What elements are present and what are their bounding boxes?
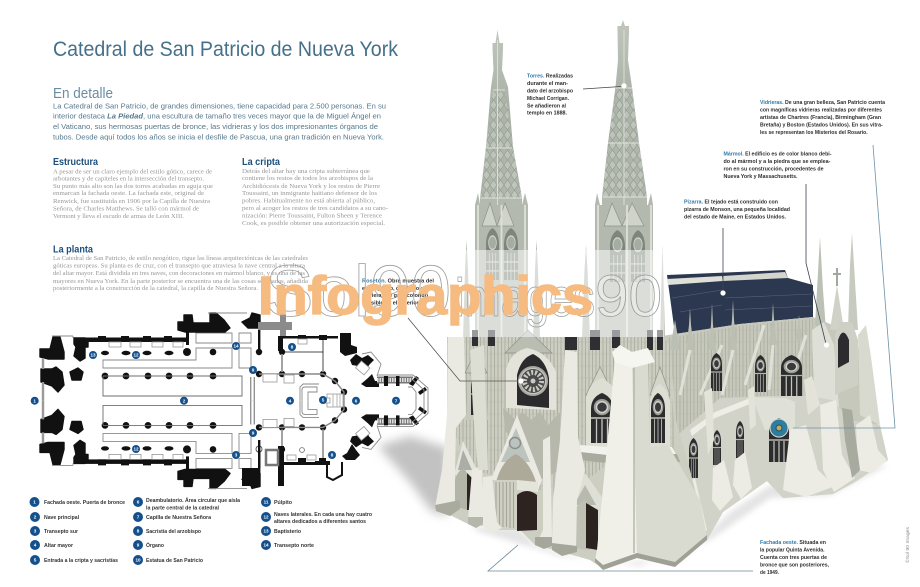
callout: Torres: templo en 1888. bbox=[527, 111, 567, 117]
callout: Vidrieras: Bretaña) y Boston (Estados Unidos). En sus vitra- bbox=[760, 123, 883, 129]
lower aisle wall bbox=[672, 396, 888, 540]
right portal bbox=[568, 473, 604, 550]
plan number markers: 14 bbox=[233, 344, 239, 349]
north transept grey cross bbox=[258, 314, 292, 338]
north sacristy wall bbox=[278, 333, 357, 356]
ledges below windows bbox=[580, 445, 680, 463]
gallery below rose window bbox=[503, 408, 560, 480]
plan number markers: 8 bbox=[291, 345, 294, 350]
side windows bbox=[689, 353, 802, 478]
dark slits under towers bbox=[472, 330, 663, 350]
text block: La cripta: pobres. Habitualmente no está abierta al público, bbox=[242, 199, 376, 205]
text block: Estructura bbox=[53, 156, 213, 220]
plan number markers: 3 bbox=[235, 453, 238, 458]
cathedral side wing bbox=[660, 233, 888, 541]
callout: Vidrieras: artistas de Chartres (Francia), Birmingham (Gran bbox=[760, 115, 882, 121]
legend: 8 bbox=[137, 529, 140, 534]
legend: Transepto norte bbox=[274, 543, 314, 549]
text block: La cripta: nización: Pierre Toussaint, Fulton Sheen y Terence bbox=[242, 214, 382, 220]
legend: Sacristía del arzobispo bbox=[146, 529, 201, 535]
text block: La planta: del altar mayor. Está dividida en tres naves, con decoraciones en mármol blanco, y es una de las bbox=[53, 271, 306, 277]
translucent white band over towers bbox=[448, 250, 664, 337]
east end chapel and pinnacles bbox=[812, 233, 880, 430]
legend: 3 bbox=[34, 529, 37, 534]
legend: Estatua de San Patricio bbox=[146, 558, 203, 564]
legend: Fachada oeste. Puerta de bronce bbox=[44, 500, 125, 506]
clerestory wall bbox=[660, 317, 888, 540]
legend: Nave principal bbox=[44, 515, 79, 521]
text block: Estructura: Señora, de Charles Matthews. Se talló con mármol de bbox=[53, 206, 199, 212]
cathedral spires and towers bbox=[463, 20, 665, 340]
text block: La planta: mayores en Nueva York. En la parte posterior se encuentra una de las cosas separadas, añadida bbox=[53, 279, 308, 285]
callout: Fachada oeste bbox=[488, 540, 829, 576]
plan number markers: 1 bbox=[33, 398, 36, 403]
title: Catedral de San Patricio de Nueva York bbox=[53, 37, 398, 61]
callout: Marmol bbox=[724, 152, 832, 348]
text block: La cripta: pero al acoger los restos de tres candidatos a su cano- bbox=[242, 206, 388, 212]
plan number markers: 7 bbox=[395, 398, 398, 403]
callout: Vidrieras bbox=[760, 100, 895, 428]
left spire bbox=[480, 30, 522, 210]
south sacristy and stairs bbox=[242, 440, 360, 486]
legend: Naves laterales. En cada una hay cuatro bbox=[274, 512, 372, 518]
intro block: En detalle: el Vaticano, sus hermosas puertas de bronce, las vidrieras y los dos impresionantes órganos de bbox=[53, 122, 378, 131]
legend: Órgano bbox=[146, 541, 164, 549]
text block: Estructura: A pesar de ser un claro ejemplo del estilo gótico, carece de bbox=[53, 170, 212, 176]
plan number markers: 12 bbox=[133, 447, 139, 452]
right tower bbox=[582, 193, 665, 340]
callout: Vidrieras: les se representan los Misterios del Rosario. bbox=[760, 130, 868, 136]
legend: 5 bbox=[34, 558, 37, 563]
west buttresses bbox=[435, 337, 585, 556]
legend: Púlpito bbox=[274, 500, 292, 506]
facade stonework texture bbox=[447, 337, 676, 500]
watermark: Infographics bbox=[258, 266, 593, 326]
facade windows bbox=[466, 373, 670, 447]
plan number markers: 2 bbox=[183, 398, 186, 403]
legend: 9 bbox=[137, 543, 140, 548]
text block: La planta: góticas europeas. Su planta es de cruz, con el transepto que atraviesa la nave central a la altura bbox=[53, 264, 305, 270]
callout: Roseton: vidrieras de gran colorido bbox=[362, 293, 429, 299]
slate roof bbox=[667, 270, 813, 334]
north half of plan bbox=[40, 313, 428, 401]
text block: La cripta: contiene los restos de todos los arzobispos de la bbox=[242, 176, 373, 182]
legend bbox=[30, 497, 372, 565]
callout: Fachada oeste: Cuenta con tres puertas de bbox=[760, 555, 827, 561]
legend: altares dedicados a diferentes santos bbox=[274, 519, 366, 525]
callout: Fachada oeste: la popular Quinta Avenida. bbox=[760, 548, 825, 554]
left tower bbox=[463, 193, 540, 340]
main portal bbox=[487, 415, 542, 531]
plan number markers: 6 bbox=[355, 398, 358, 403]
text block: La cripta: Cook, es posible obtener una autorización especial. bbox=[242, 221, 386, 227]
central corner buttress bbox=[595, 345, 707, 570]
intro block: En detalle: En detalle bbox=[53, 85, 113, 102]
text block: La cripta: Toussaint, un inmigrante haitiano defensor de los bbox=[242, 190, 378, 197]
plan number markers bbox=[31, 342, 400, 459]
text block: La cripta bbox=[242, 156, 388, 227]
callout: Pizarra bbox=[684, 200, 791, 296]
callout: Pizarra: del estado de Maine, en Estados Unidos. bbox=[684, 215, 786, 221]
side buttresses bbox=[680, 376, 887, 541]
legend: 2 bbox=[34, 515, 37, 520]
text block: La planta: La Catedral de San Patricio, de estilo neogótico, rigue las líneas arquitectónicas de las catedrales bbox=[53, 256, 309, 262]
legend: 4 bbox=[34, 543, 37, 548]
gables above windows bbox=[465, 330, 670, 395]
callout: Roseton bbox=[362, 279, 524, 384]
text block: La planta bbox=[53, 244, 309, 292]
legend: la parte central de la catedral bbox=[146, 505, 219, 511]
callout: Roseton: estilo gótico, diseñado con bbox=[362, 286, 431, 292]
intro block: En detalle: La Catedral de San Patricio, de grandes dimensiones, tiene capacidad para 2.500 personas. En su bbox=[53, 101, 386, 110]
plan number markers: 9 bbox=[252, 431, 255, 436]
legend: 13 bbox=[263, 529, 269, 534]
image credit: ©Sol 90 Images bbox=[904, 526, 911, 563]
callout: Marmol: ron en su construcción, procedentes de bbox=[724, 167, 824, 173]
legend: Altar mayor bbox=[44, 543, 74, 549]
text block: La planta: La planta bbox=[53, 244, 93, 256]
callout: Marmol: Nueva York y Massachusetts. bbox=[724, 174, 798, 180]
text block: Estructura: arbotantes y de capiteles en la intersección del transepto. bbox=[53, 177, 205, 183]
callout: Torres: durante el man- bbox=[527, 81, 568, 87]
callout: Fachada oeste: bronce que son posteriores, bbox=[760, 563, 829, 569]
callout: Torres: Torres. Realizadas bbox=[527, 74, 573, 80]
south half of plan bbox=[40, 401, 428, 488]
callout: Pizarra: pizarra de Monson, una pequeña localidad bbox=[684, 207, 791, 213]
rose window bbox=[506, 348, 556, 410]
callout: Fachada oeste: Fachada oeste. Situada en bbox=[760, 540, 827, 546]
legend: Baptisterio bbox=[274, 529, 301, 535]
callout: Torres bbox=[527, 74, 627, 117]
ground shadow of the cathedral bbox=[378, 436, 888, 566]
intro block: En detalle bbox=[53, 85, 386, 142]
plan number markers: 4 bbox=[289, 398, 292, 403]
callout: Pizarra: Pizarra. El tejado está construido con bbox=[684, 200, 779, 206]
facade body bbox=[436, 337, 707, 568]
legend: 10 bbox=[135, 558, 141, 563]
callout: Vidrieras: Vidrieras. De una gran belleza, San Patricio cuenta bbox=[760, 100, 886, 106]
watermark bbox=[258, 252, 662, 332]
legend: 14 bbox=[263, 543, 269, 548]
text block: La cripta: La cripta bbox=[242, 156, 280, 168]
flying buttress struts bbox=[680, 325, 806, 395]
text block: La cripta: Archidiócesis de Nueva York y los restos de Pierre bbox=[242, 184, 380, 190]
legend: Deambulatorio. Área circular que aísla bbox=[146, 497, 241, 504]
plan number markers: 8 bbox=[331, 453, 334, 458]
callout: Torres: Michael Corrigan. bbox=[527, 96, 569, 102]
plan number markers: 5 bbox=[322, 398, 325, 403]
callout: Roseton: Rosetón. Obra muestra del bbox=[362, 279, 434, 285]
far right portal bbox=[660, 470, 690, 542]
text block: Estructura: Renwick, fue sustituida en 1906 por la Capilla de Nuestra bbox=[53, 198, 210, 205]
left portal bbox=[454, 441, 477, 512]
callout: Roseton: y visible en el exterior. bbox=[362, 301, 420, 307]
callout: Vidrieras: con magníficas vidrieras realizadas por diferentes bbox=[760, 108, 882, 114]
legend: Transepto sur bbox=[44, 529, 79, 535]
flying buttress pinnacles bbox=[670, 300, 803, 350]
altar steps bbox=[322, 394, 343, 407]
callout: Torres: Se añadieron al bbox=[527, 103, 566, 109]
intro block: En detalle: interior destaca La Piedad, una escultura de tamaño tres veces mayor que la de Miguel Ángel en bbox=[53, 112, 381, 121]
legend: Capilla de Nuestra Señora bbox=[146, 515, 212, 521]
cathedral west front bbox=[435, 330, 707, 570]
legend: 7 bbox=[137, 515, 140, 520]
text block: La planta: posteriormente a la construcción de la catedral, la capilla de Nuestra Señora. bbox=[53, 286, 259, 292]
intro block: En detalle: tubos. Desde aquí todos los años se inicia el desfile de Pascua, una gran tradición en Nueva York. bbox=[53, 133, 384, 142]
text block: La cripta: Detrás del altar hay una cripta subterránea que bbox=[242, 169, 370, 175]
right spire bbox=[602, 20, 647, 210]
plan number markers: 9 bbox=[252, 368, 255, 373]
legend: 11 bbox=[264, 500, 269, 505]
watermark: 90 bbox=[595, 264, 662, 329]
watermark: images bbox=[455, 268, 595, 328]
callout: Fachada oeste: de 1949. bbox=[760, 570, 779, 576]
legend: Entrada a la cripta y sacristías bbox=[44, 558, 118, 564]
plan number markers: 13 bbox=[90, 353, 96, 358]
floor plan bbox=[31, 313, 428, 488]
clerestory stonework texture bbox=[668, 319, 815, 440]
watermark: Sol90 bbox=[265, 252, 451, 332]
plan number markers: 12 bbox=[133, 353, 139, 358]
text block: Estructura: enmarcan la fachada oeste. La fachada este, original de bbox=[53, 190, 204, 197]
legend: 1 bbox=[33, 500, 36, 505]
text block: Estructura: Vermont y lleva el escudo de armas de León XIII. bbox=[53, 214, 185, 220]
callout: Marmol: Mármol. El edificio es de color blanco debi- bbox=[724, 152, 832, 158]
text block: Estructura: Estructura bbox=[53, 156, 98, 168]
legend: 12 bbox=[263, 515, 269, 520]
callout: Marmol: do al mármol y a la piedra que se emplea- bbox=[724, 159, 831, 165]
text block: Estructura: Su punto más alto son las dos torres acabadas en aguja que bbox=[53, 184, 213, 190]
legend: 6 bbox=[137, 500, 140, 505]
callout: Torres: dato del arzobispo bbox=[527, 89, 574, 95]
